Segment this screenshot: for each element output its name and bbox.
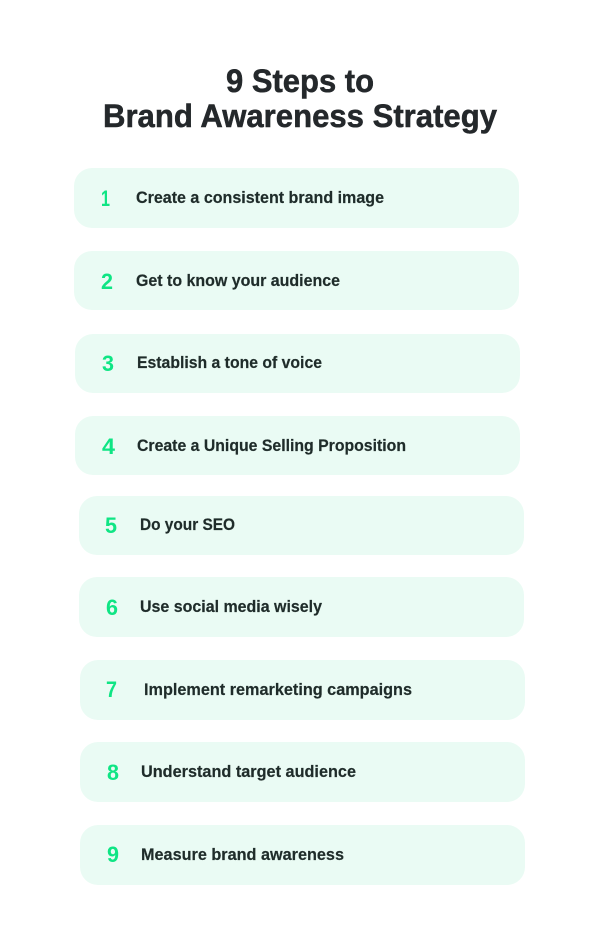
panel: step 5: Do your SEO [140, 516, 235, 534]
panel: step 1: 1 [101, 186, 110, 211]
panel: step 5 [79, 496, 524, 555]
panel: step 9 [80, 825, 525, 885]
panel: step 7: 7 [106, 677, 117, 702]
panel: step 3 [75, 334, 520, 393]
panel: step 2: Get to know your audience [136, 272, 340, 290]
panel: step 2: 2 [101, 269, 113, 294]
panel: step 9: Measure brand awareness [141, 846, 344, 864]
panel: step 6: 6 [106, 595, 118, 620]
panel: step 7 [80, 660, 525, 720]
panel: step 4: 4 [102, 434, 116, 459]
panel: step 3: Establish a tone of voice [137, 354, 322, 372]
panel: step 8: Understand target audience [141, 763, 356, 781]
panel: step 8: 8 [107, 760, 119, 785]
panel: step 5: 5 [105, 513, 117, 538]
panel: step 7: Implement remarketing campaigns [144, 681, 412, 699]
panel: step 3: 3 [102, 351, 114, 376]
panel: step 1: Create a consistent brand image [136, 189, 384, 207]
panel: step 6: Use social media wisely [140, 598, 323, 616]
panel: step 2 [74, 251, 519, 310]
title: 9 Steps to [226, 63, 374, 99]
panel: step 9: 9 [107, 842, 119, 867]
title [103, 63, 497, 134]
panel: step 4 [75, 416, 520, 475]
panel: step 6 [79, 577, 524, 637]
panel: step 4: Create a Unique Selling Proposition [137, 437, 406, 455]
panel: step 8 [80, 742, 525, 802]
title: Brand Awareness Strategy [103, 98, 497, 134]
panel: step 1 [74, 168, 519, 228]
